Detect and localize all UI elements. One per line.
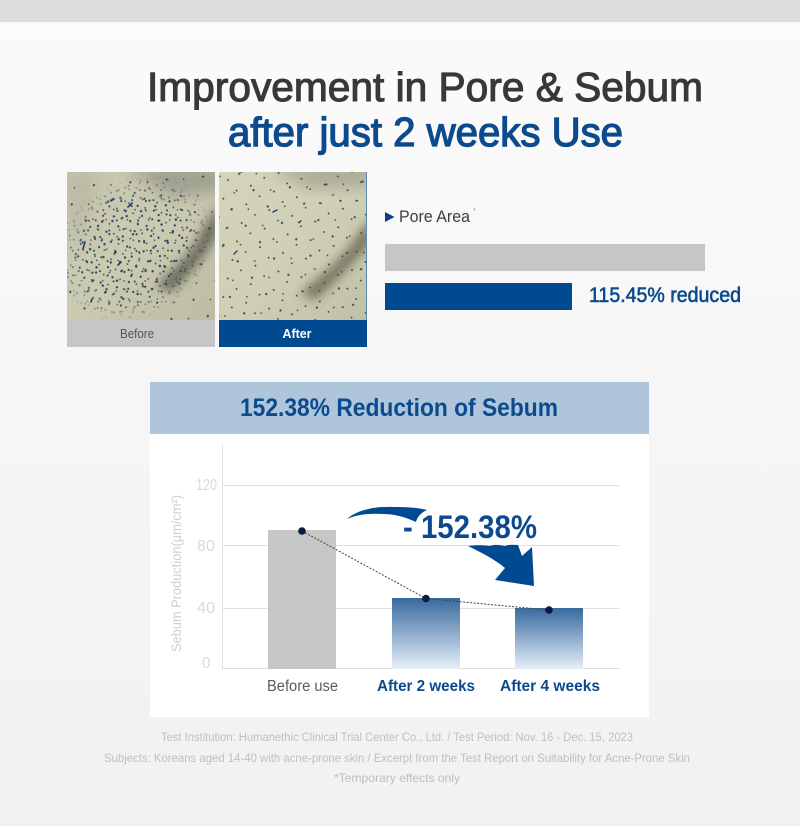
sebum panel background xyxy=(150,434,649,717)
bar: after 2 weeks xyxy=(392,598,460,669)
x axis labels: Before use xyxy=(267,678,338,695)
sebum panel header xyxy=(150,382,649,434)
x axis labels: After 4 weeks xyxy=(500,678,600,695)
y axis ticks: 40 xyxy=(197,600,215,617)
reduction value: - 152.38% xyxy=(403,509,537,545)
footnotes: Subjects: Koreans aged 14-40 with acne-prone skin / Excerpt from the Test Report on Suitability for Acne-Prone Skin xyxy=(104,751,690,765)
heading: pore area: * xyxy=(473,208,476,215)
value label: 115.45% reduced xyxy=(589,284,741,307)
heading: pore area: Pore Area xyxy=(399,207,471,226)
bar chart xyxy=(169,444,619,695)
arrow: reduction xyxy=(347,507,534,586)
data points xyxy=(298,527,553,614)
panel: sebum reduction xyxy=(150,382,649,717)
y axis ticks xyxy=(196,477,217,672)
footnotes: *Temporary effects only xyxy=(334,771,460,785)
photo: after skin xyxy=(219,165,375,320)
photo: before skin xyxy=(67,172,215,320)
dotted trend line xyxy=(302,531,549,610)
label: before xyxy=(67,320,215,347)
y axis ticks: 80 xyxy=(197,538,215,555)
icon: pointer triangle xyxy=(385,212,394,222)
label: after: After xyxy=(282,327,312,341)
bar: before use xyxy=(268,530,336,669)
x axis labels: After 2 weeks xyxy=(377,678,475,695)
title xyxy=(147,64,703,155)
panel: pore area result xyxy=(385,207,741,310)
top band xyxy=(0,0,800,22)
y axis ticks: 120 xyxy=(196,477,217,494)
footnotes: Test Institution: Humanethic Clinical Trial Center Co., Ltd. / Test Period: Nov. 16 - Dec. 15, 2023 xyxy=(161,730,633,744)
y axis ticks: 0 xyxy=(202,655,211,672)
title: Improvement in Pore & Sebum xyxy=(147,64,703,110)
title: after just 2 weeks Use xyxy=(228,109,623,155)
panel: before and after skin photos xyxy=(67,165,375,347)
y axis title: Sebum Production(μm/cm²) xyxy=(169,495,184,652)
x axis labels xyxy=(267,678,600,695)
footnotes xyxy=(104,730,690,785)
label: before: Before xyxy=(120,327,154,341)
sebum panel header: 152.38% Reduction of Sebum xyxy=(240,394,558,422)
bar: after xyxy=(385,283,572,310)
label: after xyxy=(219,320,367,347)
bar: before xyxy=(385,244,705,271)
bar: after 4 weeks xyxy=(515,608,583,669)
